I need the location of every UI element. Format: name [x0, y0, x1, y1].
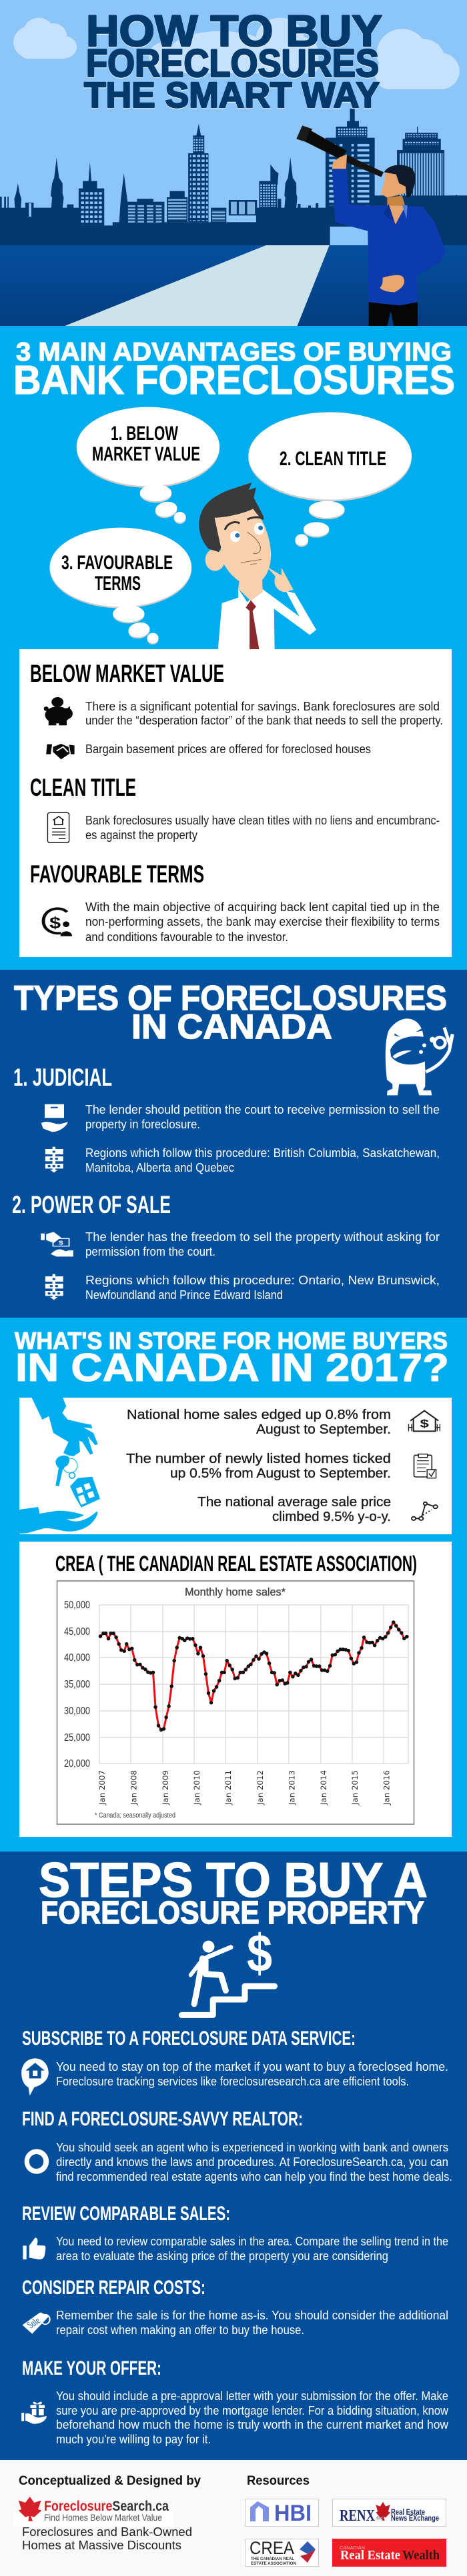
heading: STEPS TO BUY A	[39, 1854, 428, 1908]
section background	[0, 326, 467, 970]
credit tagline	[22, 2525, 192, 2552]
section background	[0, 1318, 467, 1852]
icon: man climbing stairs to dollar	[181, 1924, 275, 2015]
x axis labels: Jan 2013	[287, 1770, 296, 1806]
stat: home sales: National home sales edged up 0.8% from	[127, 1408, 391, 1422]
icon: title document	[47, 812, 69, 842]
y axis labels	[64, 1600, 90, 1770]
logo: ForeclosureSearch.ca	[13, 2497, 173, 2526]
bubble labels: 1. BELOW	[111, 423, 178, 445]
heading: step 5: MAKE YOUR OFFER:	[22, 2357, 161, 2379]
x axis labels: Jan 2008	[129, 1770, 139, 1806]
cloud left	[13, 18, 77, 59]
icon: hand holding gift	[21, 2402, 47, 2424]
y axis labels: 40,000	[64, 1652, 90, 1664]
illustration: man with telescope	[296, 125, 446, 326]
heading: clean title: CLEAN TITLE	[30, 774, 136, 801]
x axis labels: Jan 2009	[161, 1770, 170, 1806]
bubble 2 shapes	[248, 412, 412, 547]
resources heading: Resources	[247, 2473, 310, 2488]
text: power of sale regions: Regions which follow this procedure: Ontario, New Brunswick,	[85, 1273, 440, 1287]
heading: below market value: BELOW MARKET VALUE	[30, 660, 224, 687]
heading: IN CANADA	[131, 1008, 332, 1046]
text: step 5	[56, 2389, 449, 2446]
credit tagline: Homes at Massive Discounts	[22, 2539, 181, 2552]
icon: mascot ok gesture	[386, 1018, 452, 1095]
stat: sale price	[197, 1495, 391, 1524]
icon: regions tree	[45, 1147, 63, 1172]
illustration: thinking man	[199, 483, 316, 649]
logo: CREA: THE CANADIAN REAL	[251, 2557, 294, 2561]
bubble labels: 2. CLEAN TITLE	[280, 448, 386, 470]
text: savings potential: There is a significant potential for savings. Bank foreclosures are sold	[85, 699, 440, 713]
text: savings potential	[85, 699, 443, 727]
line chart: monthly home sales	[100, 1622, 407, 1730]
logo: RENX: RENX	[340, 2507, 376, 2525]
text: power of sale regions	[85, 1273, 440, 1302]
icon: man climbing stairs to dollar: $	[247, 1924, 272, 1983]
icon: handshake	[46, 744, 75, 759]
text: bargain prices: Bargain basement prices are offered for foreclosed houses	[85, 742, 371, 756]
logo: CREA: CREA	[250, 2538, 294, 2558]
panel background	[19, 1542, 452, 1837]
logo: HBI	[246, 2499, 319, 2526]
building windows	[29, 128, 443, 225]
text: step 2	[56, 2140, 452, 2183]
chart title: Monthly home sales*	[185, 1586, 286, 1598]
text: power of sale regions: Newfoundland and Prince Edward Island	[85, 1288, 283, 1302]
logo: RENX: Real Estate	[391, 2509, 425, 2517]
x axis labels: Jan 2016	[382, 1770, 391, 1806]
text: step 3: area to evaluate the asking price of the property you are considering	[56, 2249, 388, 2263]
cloud right	[376, 29, 460, 89]
footer background	[0, 2460, 467, 2576]
bubble labels: TERMS	[95, 573, 141, 595]
text: petition: property in foreclosure.	[85, 1117, 200, 1131]
title: HOW TO BUY	[86, 6, 382, 55]
text: judicial regions	[85, 1146, 440, 1174]
heading: judicial: 1. JUDICIAL	[13, 1064, 112, 1091]
x axis labels: Jan 2015	[350, 1770, 360, 1806]
icon: money hand: $	[59, 1240, 63, 1246]
panel background	[19, 1398, 452, 1534]
panel: advantages	[19, 649, 452, 957]
title	[84, 6, 382, 115]
credit heading: Conceptualized & Designed by	[19, 2473, 201, 2488]
section: types of foreclosures	[0, 970, 467, 1318]
text: step 4	[56, 2308, 448, 2337]
icon: thumbs up	[23, 2237, 45, 2259]
icon: piggy bank	[44, 697, 73, 725]
x axis labels: Jan 2012	[256, 1770, 265, 1806]
logo: Canadian Real Estate Wealth	[332, 2539, 446, 2567]
stat: sale price: The national average sale price	[197, 1495, 391, 1510]
text: step 4: repair cost when making an offer to buy the house.	[56, 2323, 304, 2337]
text: freedom to sell: permission from the court.	[85, 1244, 215, 1258]
panel: CREA chart	[19, 1542, 452, 1837]
section: 3 main advantages	[0, 326, 467, 970]
heading	[13, 338, 455, 403]
icon: price route	[412, 1502, 438, 1520]
heading: IN CANADA IN 2017?	[15, 1346, 449, 1390]
logo: RENX: .ca	[375, 2515, 382, 2521]
text: step 3	[56, 2234, 448, 2263]
y axis labels: 30,000	[64, 1706, 90, 1717]
text: petition: The lender should petition the court to receive permission to sell the	[85, 1102, 440, 1116]
title: THE SMART WAY	[84, 75, 380, 115]
text: clean titles: es against the property	[85, 828, 198, 842]
gridlines	[99, 1605, 408, 1764]
icon: house with dollar: $	[420, 1418, 429, 1430]
hero scene: sky, clouds, skyline, road	[0, 0, 467, 326]
icon: box on hand	[41, 1104, 68, 1132]
stat: home sales: August to September.	[256, 1422, 391, 1437]
stat: new listings: up 0.5% from August to September.	[170, 1466, 391, 1481]
heading: power of sale: 2. POWER OF SALE	[12, 1191, 171, 1218]
heading	[39, 1854, 428, 1931]
text: step 5: much you're willing to pay for it.	[56, 2432, 211, 2446]
text: step 5: beforehand how much the home is truly worth in the current market and how	[56, 2417, 449, 2431]
logo: CREA: ESTATE ASSOCIATION	[251, 2562, 296, 2566]
logo: Canadian Real Estate Wealth: Wealth	[402, 2548, 440, 2563]
text: judicial regions: Manitoba, Alberta and Quebec	[85, 1160, 234, 1174]
logo: CREA	[246, 2538, 319, 2566]
icon: money hand	[41, 1232, 73, 1256]
panel: market stats	[19, 1398, 452, 1534]
logo: Canadian Real Estate Wealth: Real Estate	[340, 2548, 400, 2563]
text: step 4: Remember the sale is for the home as-is. You should consider the additional	[56, 2308, 448, 2322]
logo: HBI: HBI	[274, 2501, 312, 2526]
heading: favourable terms: FAVOURABLE TERMS	[30, 860, 204, 888]
section: what's in store for home buyers	[0, 1318, 467, 1852]
heading: step 3: REVIEW COMPARABLE SALES:	[22, 2203, 230, 2225]
text: step 1: Foreclosure tracking services like foreclosuresearch.ca are efficient tools.	[56, 2074, 409, 2088]
section: footer	[0, 2460, 467, 2576]
thought bubbles	[50, 407, 412, 644]
x axis labels: Jan 2011	[223, 1770, 233, 1806]
logo: ForeclosureSearch.ca: ForeclosureSearch.ca	[44, 2499, 169, 2514]
stat: sale price: climbed 9.5% y-o-y.	[272, 1510, 391, 1524]
stat: home sales	[127, 1408, 391, 1437]
bubble 1 shapes	[77, 407, 219, 524]
text: favourable terms: non-performing assets, the bank may exercise their flexibility to terms	[85, 914, 440, 928]
credit tagline: Foreclosures and Bank-Owned	[22, 2525, 192, 2539]
text: favourable terms	[85, 900, 440, 944]
text: clean titles	[85, 813, 440, 842]
heading: WHAT'S IN STORE FOR HOME BUYERS	[15, 1327, 448, 1354]
icon: house with dollar	[409, 1411, 440, 1431]
text: judicial regions: Regions which follow this procedure: British Columbia, Saskatchewan,	[85, 1146, 440, 1160]
heading: FORECLOSURE PROPERTY	[41, 1896, 424, 1931]
x axis labels: Jan 2007	[97, 1770, 107, 1806]
y axis labels: 25,000	[64, 1732, 90, 1744]
text: freedom to sell	[85, 1230, 440, 1258]
y axis labels: 35,000	[64, 1679, 90, 1690]
text: freedom to sell: The lender has the freedom to sell the property without asking for	[85, 1230, 440, 1244]
icon: sale tag: Sale	[24, 2315, 43, 2330]
text: petition	[85, 1102, 440, 1131]
chart frame	[57, 1581, 414, 1824]
icon: checklist	[414, 1454, 436, 1478]
illustration: hand passing house key	[19, 1398, 100, 1534]
icon: regions tree	[45, 1274, 63, 1300]
section background	[0, 970, 467, 1318]
icon: location pin with house	[21, 2058, 49, 2095]
stat: new listings: The number of newly listed homes ticked	[126, 1452, 391, 1466]
logo: Canadian Real Estate Wealth: CANADIAN	[340, 2546, 365, 2551]
y axis labels: 20,000	[64, 1758, 90, 1770]
heading: 3 MAIN ADVANTAGES OF BUYING	[16, 338, 452, 367]
cloud centre	[149, 18, 319, 73]
bubble labels	[61, 423, 386, 595]
panel background	[19, 649, 452, 957]
icon: dollar person	[43, 908, 72, 936]
skyline	[0, 109, 467, 245]
y axis labels: 45,000	[64, 1626, 90, 1638]
heading	[15, 1327, 449, 1390]
bubble labels: MARKET VALUE	[92, 443, 200, 465]
x axis labels	[97, 1770, 391, 1806]
icon: ring of people	[25, 2149, 49, 2174]
section: steps to buy	[0, 1852, 467, 2460]
stat: new listings	[126, 1452, 391, 1481]
heading: step 2: FIND A FORECLOSURE-SAVVY REALTOR:	[22, 2108, 303, 2130]
bubble labels: 3. FAVOURABLE	[61, 552, 173, 574]
bubble 3 shapes	[50, 528, 191, 644]
x axis labels: Jan 2014	[319, 1770, 328, 1806]
section background	[0, 1852, 467, 2460]
logo: ForeclosureSearch.ca: Find Homes Below Market Value	[44, 2512, 162, 2523]
y axis labels: 50,000	[64, 1600, 90, 1611]
logo: RENX: News EXchange	[391, 2515, 439, 2523]
x axis labels: Jan 2010	[192, 1770, 201, 1806]
title: FORECLOSURES	[86, 42, 379, 85]
icon: dollar person: $	[49, 914, 61, 932]
text: favourable terms: and conditions favourable to the investor.	[85, 930, 288, 944]
ground	[0, 245, 467, 326]
text: step 1	[56, 2059, 448, 2088]
heading	[14, 979, 447, 1046]
text: favourable terms: With the main objective of acquiring back lent capital tied up in the	[85, 900, 440, 914]
text: step 1: You need to stay on top of the market if you want to buy a foreclosed home.	[56, 2059, 448, 2073]
heading: step 4: CONSIDER REPAIR COSTS:	[22, 2277, 205, 2299]
road	[65, 245, 330, 326]
logo: RENX	[332, 2499, 446, 2526]
section: hero header	[0, 0, 467, 326]
chart footnote: * Canada; seasonally adjusted	[95, 1812, 175, 1820]
